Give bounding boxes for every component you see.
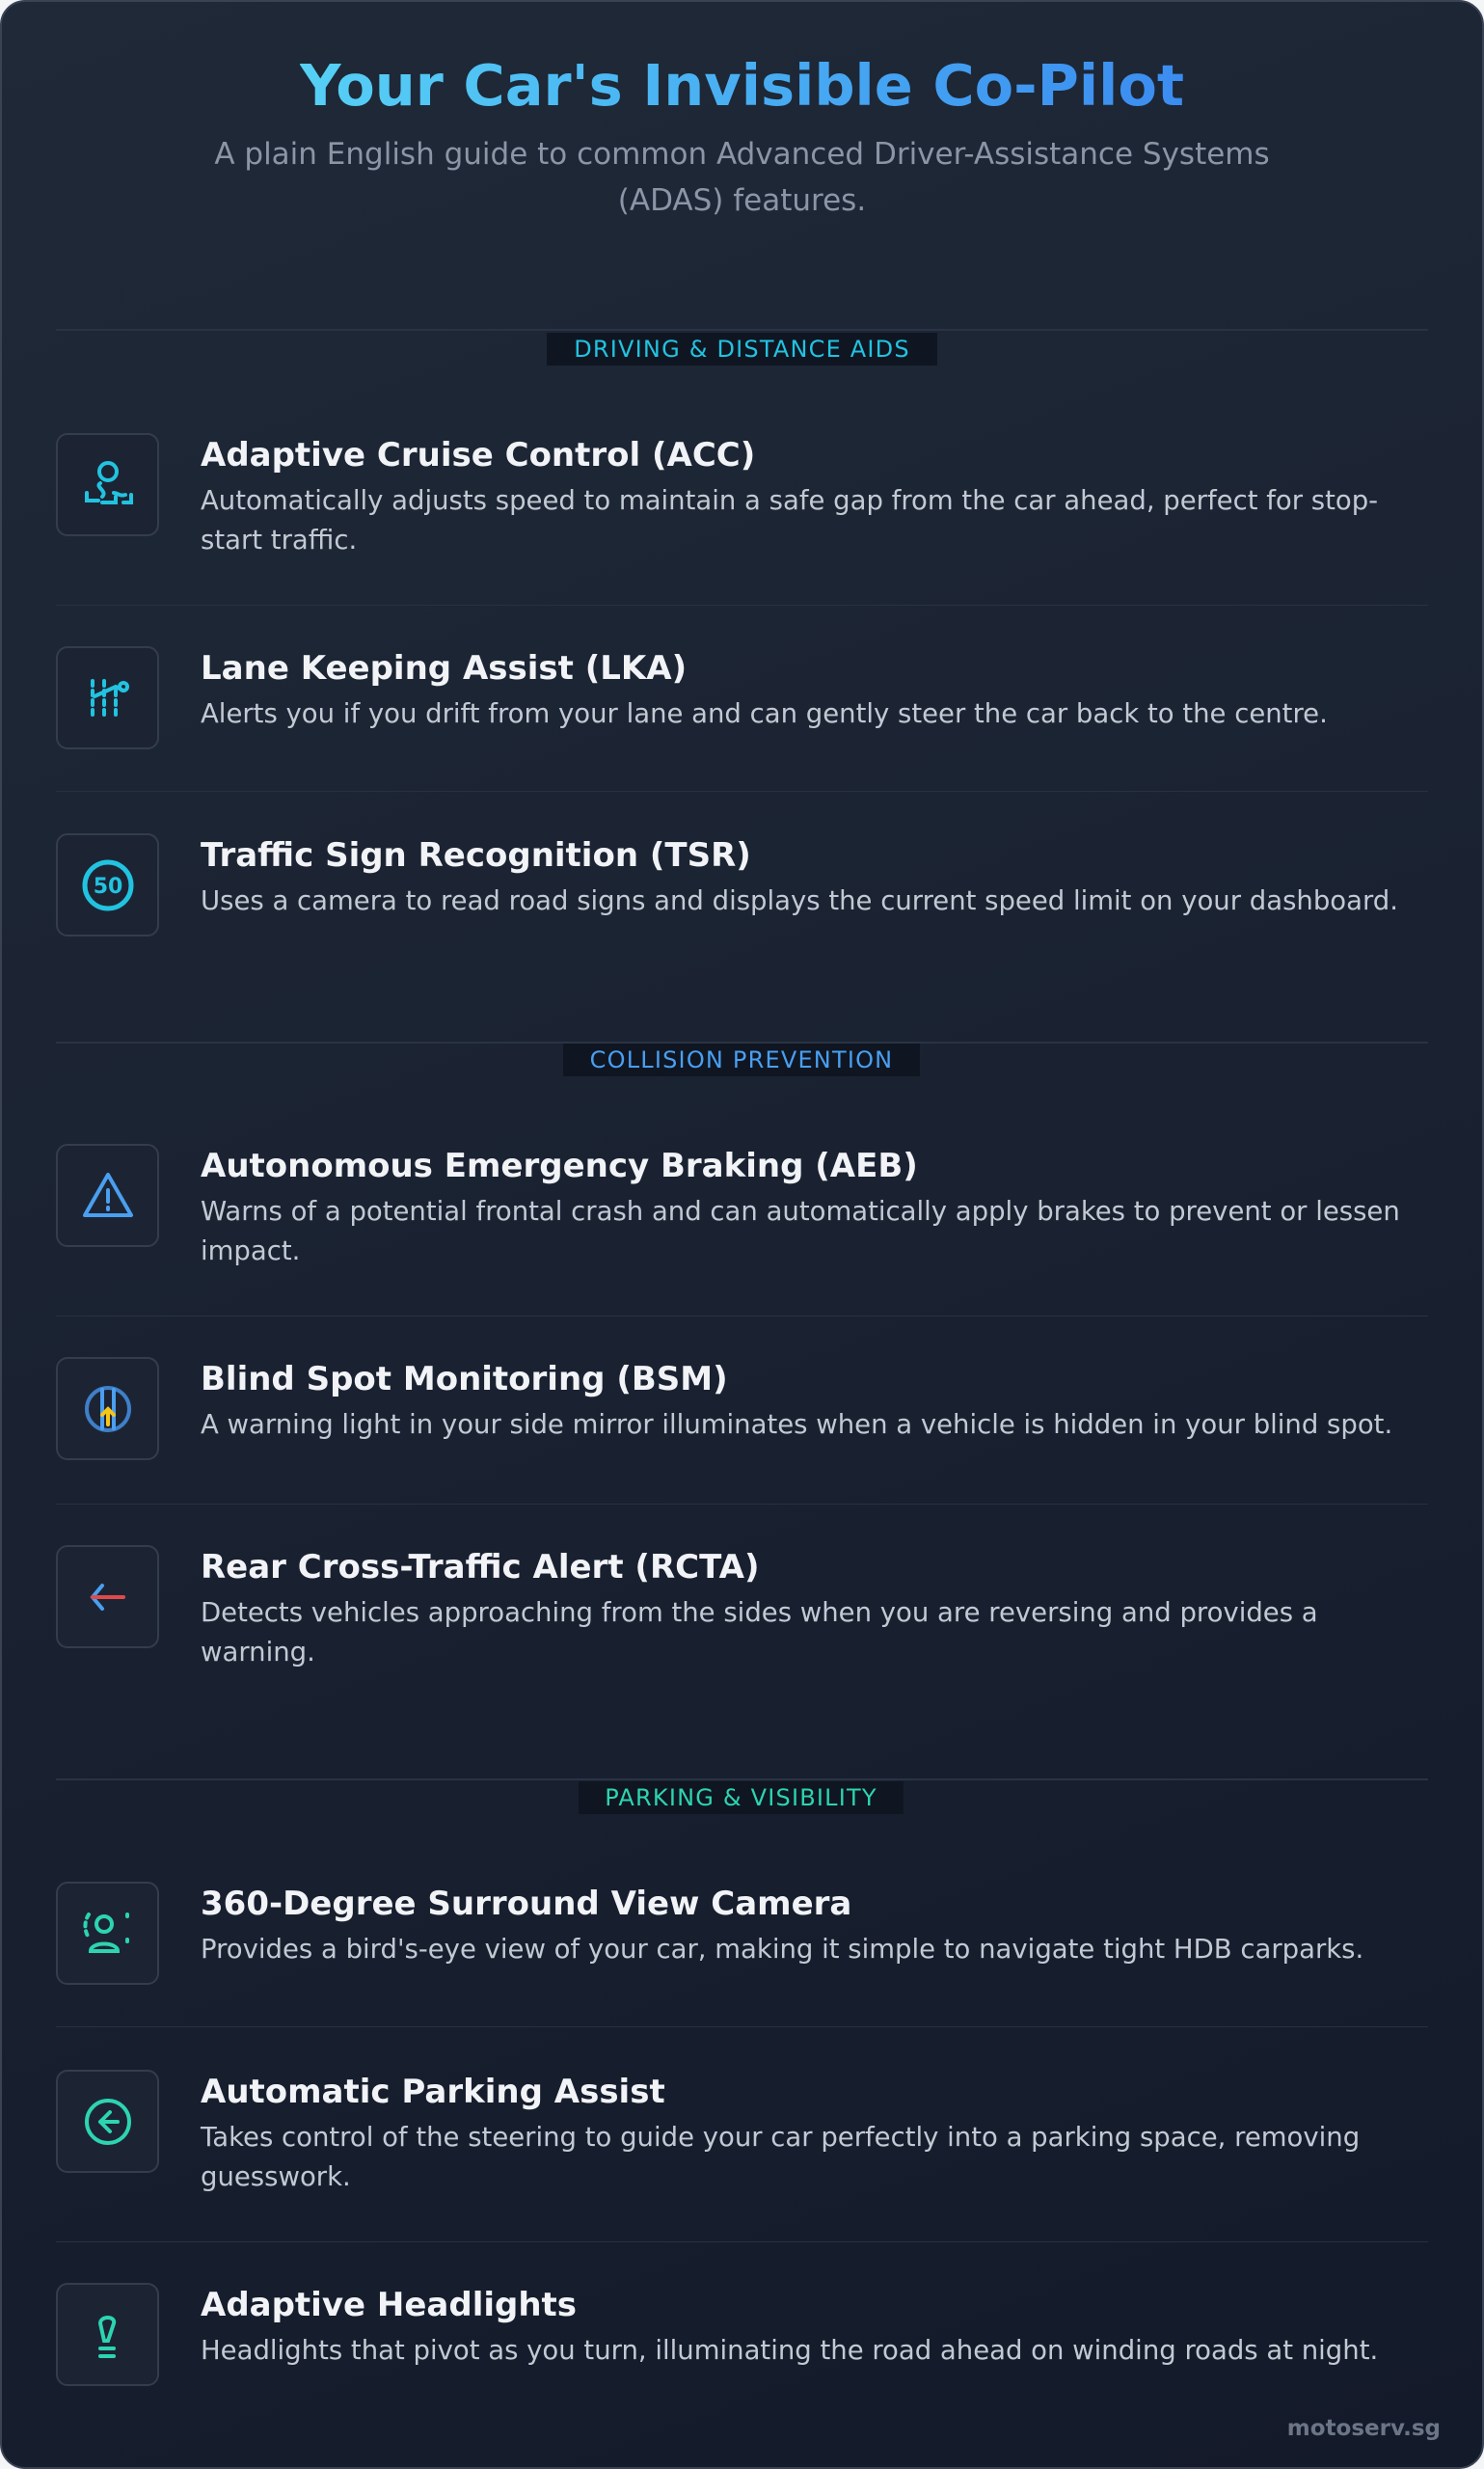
item: parking assist: Automatic Parking Assist: [201, 2073, 665, 2111]
item: ACC: Adaptive Cruise Control (ACC): [201, 436, 755, 475]
section label: collision prevention: COLLISION PREVENTION: [590, 1046, 893, 1073]
icon: adaptive cruise control: [56, 433, 159, 536]
icon: blind spot: [56, 1357, 159, 1460]
item: 360 camera: Provides a bird's-eye view of your car, making it simple to navigate tight HDB carparks.: [201, 1934, 1363, 1965]
icon: traffic sign: [56, 833, 159, 936]
item: RCTA: [201, 1548, 1318, 1668]
item: parking assist: Takes control of the steering to guide your car perfectly into a parking space, removing guesswork.: [201, 2122, 1360, 2192]
item: parking assist: [201, 2073, 1360, 2192]
item: TSR: Uses a camera to read road signs and displays the current speed limit on your dashboard.: [201, 885, 1398, 916]
item: BSM: [201, 1360, 1392, 1440]
item: headlights: [201, 2286, 1378, 2366]
item: 360 camera: 360-Degree Surround View Camera: [201, 1885, 851, 1923]
icon: rear cross traffic: [56, 1545, 159, 1648]
subtitle: A plain English guide to common Advanced Driver-Assistance Systems (ADAS) features.: [214, 137, 1270, 218]
section label: parking & visibility: [579, 1781, 904, 1814]
item: LKA: Lane Keeping Assist (LKA): [201, 649, 687, 688]
item: ACC: Automatically adjusts speed to maintain a safe gap from the car ahead, perfect for stop-start traffic.: [201, 485, 1378, 556]
item: LKA: Alerts you if you drift from your lane and can gently steer the car back to the centre.: [201, 698, 1328, 729]
icon: lane keeping: [56, 646, 159, 749]
icon: headlights: [56, 2283, 159, 2386]
footer brand: motoserv.sg: [1287, 2416, 1441, 2441]
item: BSM: A warning light in your side mirror illuminates when a vehicle is hidden in your blind spot.: [201, 1409, 1392, 1440]
icon: warning triangle: [56, 1144, 159, 1247]
icon: parking assist: [56, 2070, 159, 2173]
item: AEB: Autonomous Emergency Braking (AEB): [201, 1147, 918, 1185]
item: LKA: [201, 649, 1328, 729]
section label: driving & distance aids: DRIVING & DISTANCE AIDS: [574, 336, 910, 363]
icon: traffic sign: 50: [93, 874, 122, 899]
item: TSR: [201, 836, 1398, 916]
icon: 360 camera: [56, 1882, 159, 1985]
section label: parking & visibility: PARKING & VISIBILITY: [605, 1784, 877, 1811]
item: ACC: [201, 436, 1378, 556]
item: headlights: Headlights that pivot as you turn, illuminating the road ahead on winding roads at night.: [201, 2335, 1378, 2366]
item: headlights: Adaptive Headlights: [201, 2286, 577, 2324]
item: RCTA: Rear Cross-Traffic Alert (RCTA): [201, 1548, 760, 1587]
item: BSM: Blind Spot Monitoring (BSM): [201, 1360, 728, 1398]
item: AEB: [201, 1147, 1400, 1266]
title: Your Car's Invisible Co-Pilot: [300, 52, 1184, 119]
item: 360 camera: [201, 1885, 1363, 1965]
item: AEB: Warns of a potential frontal crash and can automatically apply brakes to prevent or lessen impact.: [201, 1196, 1400, 1266]
item: TSR: Traffic Sign Recognition (TSR): [201, 836, 751, 875]
item: RCTA: Detects vehicles approaching from the sides when you are reversing and provides a warning.: [201, 1597, 1318, 1668]
